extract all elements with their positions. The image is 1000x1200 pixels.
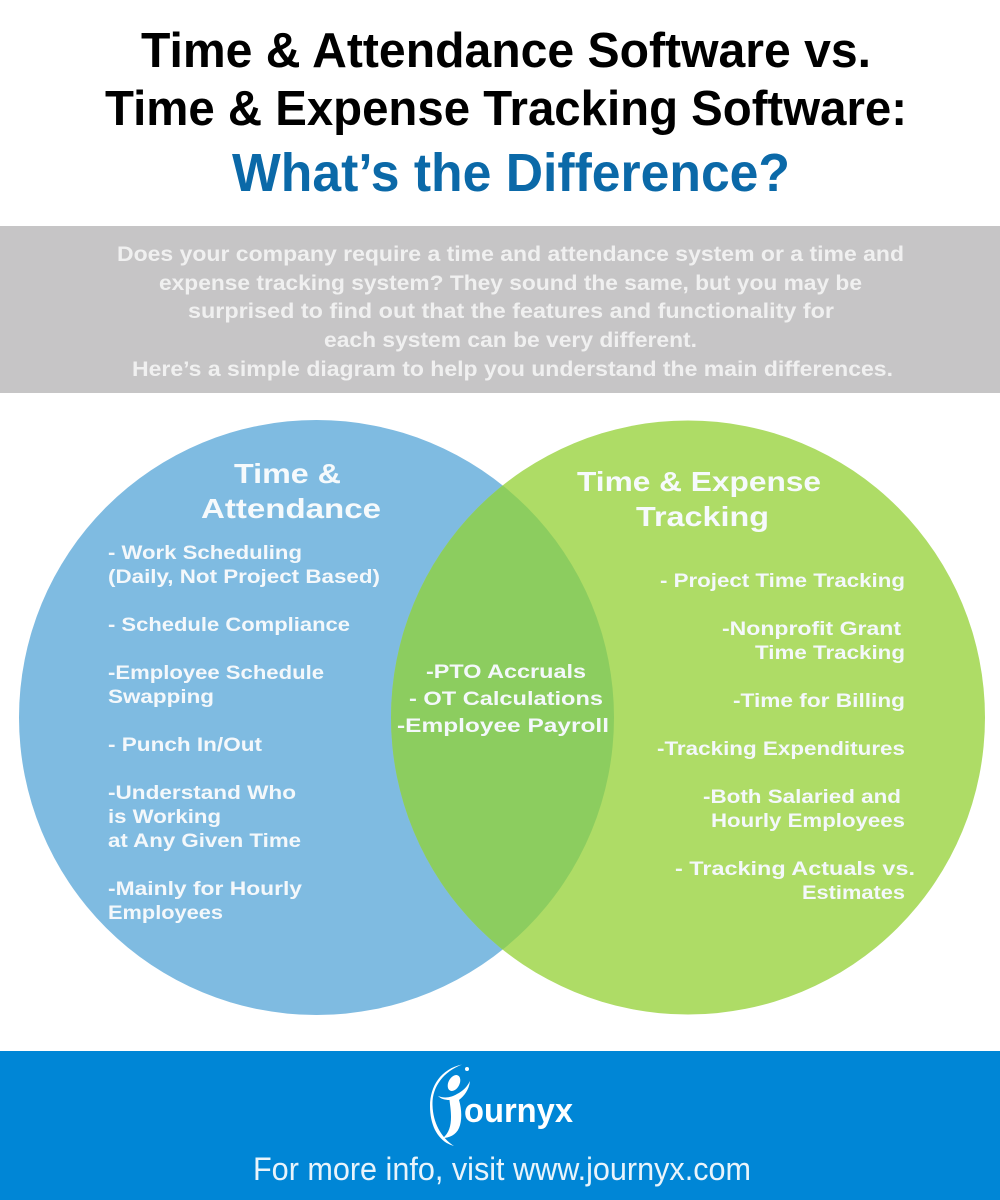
venn diagram	[19, 420, 985, 1015]
list: time and expense tracking features: Hourly Employees	[711, 810, 905, 832]
list: time and attendance features: at Any Given Time	[108, 830, 301, 852]
intro text: surprised to find out that the features and functionality for	[188, 299, 835, 323]
circle: time and attendance	[19, 420, 614, 1015]
title	[105, 24, 907, 203]
list: time and attendance features: -Understand Who	[108, 782, 296, 804]
list: time and expense tracking features: Time Tracking	[755, 642, 905, 664]
heading: time and attendance: Time &	[234, 458, 341, 489]
title: Time & Attendance Software vs.	[141, 24, 871, 78]
intro text: each system can be very different.	[324, 328, 697, 352]
list: time and attendance features: Swapping	[108, 686, 214, 708]
list: time and attendance features: - Work Scheduling	[108, 542, 302, 564]
list: time and expense tracking features: Estimates	[802, 882, 905, 904]
title: What’s the Difference?	[232, 143, 790, 203]
heading: time and expense tracking: Tracking	[636, 501, 769, 532]
footer link text: For more info, visit www.journyx.com	[253, 1151, 751, 1187]
heading: time and expense tracking	[577, 466, 821, 532]
list: shared features: -PTO Accruals	[426, 661, 586, 683]
list: shared features	[397, 661, 609, 737]
title: Time & Expense Tracking Software:	[105, 82, 907, 136]
circle overlap	[391, 486, 614, 950]
list: time and expense tracking features: - Tracking Actuals vs.	[675, 858, 915, 880]
list: time and expense tracking features: -Time for Billing	[733, 690, 905, 712]
panel: footer	[0, 1051, 1000, 1200]
list: time and expense tracking features: -Tracking Expenditures	[657, 738, 905, 760]
heading: time and attendance: Attendance	[201, 493, 381, 524]
list: time and attendance features: Employees	[108, 902, 223, 924]
list: time and attendance features: -Employee Schedule	[108, 662, 324, 684]
logo wordmark: ournyx	[464, 1092, 573, 1130]
heading: time and attendance	[201, 458, 381, 524]
intro text	[117, 242, 904, 381]
intro text: Does your company require a time and attendance system or a time and	[117, 242, 904, 266]
heading: time and expense tracking: Time & Expense	[577, 466, 821, 497]
list: time and attendance features: (Daily, Not Project Based)	[108, 566, 380, 588]
list: time and attendance features	[108, 542, 380, 924]
panel: intro band	[0, 226, 1000, 393]
circle: time and expense tracking	[391, 420, 985, 1014]
list: time and expense tracking features: -Nonprofit Grant	[722, 618, 902, 640]
icon: journyx logo figure	[430, 1064, 470, 1146]
list: time and attendance features: is Working	[108, 806, 221, 828]
list: time and attendance features: - Schedule Compliance	[108, 614, 350, 636]
list: time and expense tracking features: -Both Salaried and	[703, 786, 901, 808]
list: shared features: -Employee Payroll	[397, 715, 609, 737]
list: shared features: - OT Calculations	[409, 688, 603, 710]
list: time and expense tracking features: - Project Time Tracking	[660, 570, 905, 592]
list: time and attendance features: -Mainly for Hourly	[108, 878, 302, 900]
intro text: Here’s a simple diagram to help you understand the main differences.	[132, 357, 893, 381]
intro text: expense tracking system? They sound the same, but you may be	[159, 271, 862, 295]
list: time and expense tracking features	[657, 570, 915, 904]
list: time and attendance features: - Punch In/Out	[108, 734, 263, 756]
